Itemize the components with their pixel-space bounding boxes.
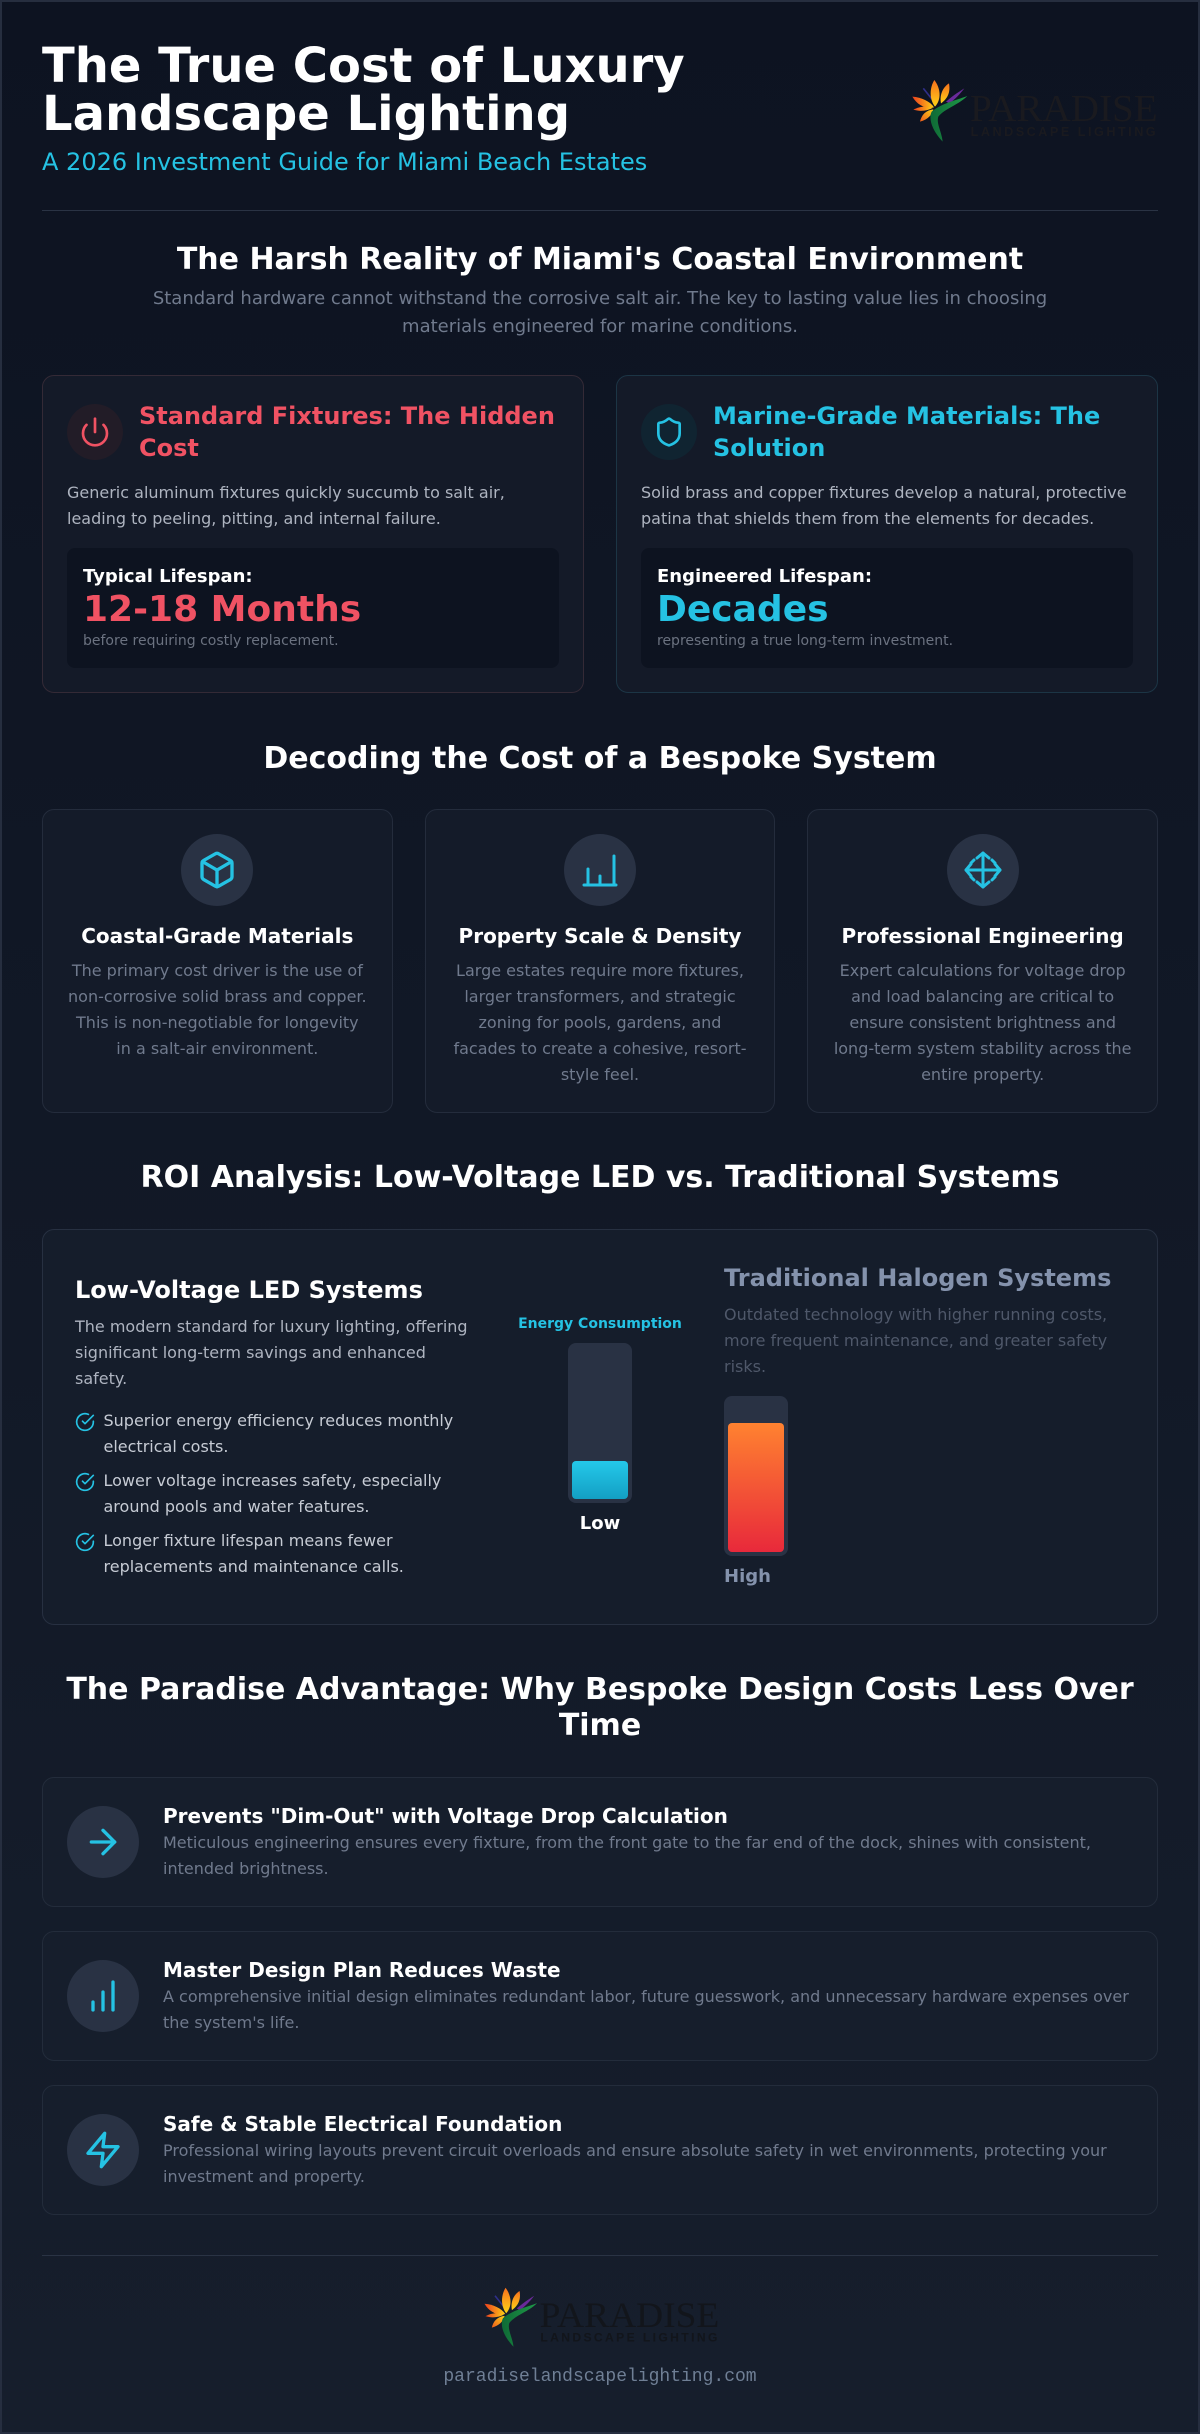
card text bbox=[834, 960, 1132, 1084]
benefit 3 bbox=[104, 1530, 404, 1576]
halogen description: risks. bbox=[724, 1356, 766, 1376]
benefit 2: around pools and water features. bbox=[104, 1496, 370, 1516]
panel: ROI comparison bbox=[42, 1229, 1158, 1625]
card text: leading to peeling, pitting, and internal failure. bbox=[67, 509, 441, 528]
note: representing a true long-term investment. bbox=[657, 633, 953, 649]
row text: intended brightness. bbox=[163, 1859, 329, 1878]
card text: style feel. bbox=[561, 1064, 639, 1084]
halogen column title: Traditional Halogen Systems bbox=[724, 1264, 1111, 1292]
panel: marine-grade materials bbox=[616, 375, 1158, 693]
card text: non-corrosive solid brass and copper. bbox=[68, 986, 367, 1006]
heading: decoding the cost: Decoding the Cost of a Bespoke System bbox=[263, 741, 937, 776]
card text: Generic aluminum fixtures quickly succumb to salt air, bbox=[67, 483, 505, 502]
card title: Property Scale & Density bbox=[459, 924, 741, 948]
card text: larger transformers, and strategic bbox=[464, 986, 736, 1006]
website URL: paradiselandscapelighting.com bbox=[443, 2367, 757, 2387]
title bbox=[42, 38, 685, 142]
icon: lightning bbox=[67, 2114, 139, 2186]
benefit 2 bbox=[104, 1470, 441, 1516]
heading: Paradise advantage: The Paradise Advantage: Why Bespoke Design Costs Less Over bbox=[66, 1672, 1134, 1707]
card title: Marine-Grade Materials: The bbox=[713, 402, 1100, 430]
icon: box bbox=[181, 834, 253, 906]
callout: engineered lifespan bbox=[641, 548, 1133, 668]
card text: The primary cost driver is the use of bbox=[72, 960, 363, 980]
panel: voltage drop bbox=[42, 1777, 1158, 1907]
row text bbox=[163, 1987, 1129, 2032]
logo: Paradise Landscape Lighting: LANDSCAPE LIGHTING bbox=[971, 125, 1156, 139]
card title bbox=[713, 402, 1100, 462]
logo: footer bbox=[484, 2288, 719, 2346]
card title: Professional Engineering bbox=[842, 924, 1124, 948]
heading: harsh reality: The Harsh Reality of Miami's Coastal Environment bbox=[177, 242, 1023, 277]
value: Decades bbox=[657, 589, 829, 630]
card text bbox=[641, 483, 1127, 528]
callout: typical lifespan bbox=[67, 548, 559, 668]
row text: Meticulous engineering ensures every fixture, from the front gate to the far end of the dock, shines with consistent, bbox=[163, 1833, 1091, 1852]
LED value label: Low bbox=[580, 1513, 620, 1534]
benefit 3: Longer fixture lifespan means fewer bbox=[104, 1530, 393, 1550]
icon: arrow bbox=[67, 1806, 139, 1878]
card text bbox=[68, 960, 367, 1058]
header bbox=[42, 38, 1158, 176]
intro paragraph bbox=[153, 288, 1047, 337]
row title: Prevents "Dim-Out" with Voltage Drop Calculation bbox=[163, 1804, 728, 1828]
value: 12-18 Months bbox=[83, 589, 361, 630]
card text: patina that shields them from the elements for decades. bbox=[641, 509, 1094, 528]
card text bbox=[67, 483, 505, 528]
row text: investment and property. bbox=[163, 2167, 365, 2186]
row text: Professional wiring layouts prevent circuit overloads and ensure absolute safety in wet environments, protecting your bbox=[163, 2141, 1107, 2160]
logo: footer: PARADISE bbox=[539, 2295, 719, 2335]
bar: halogen energy high bbox=[724, 1396, 788, 1556]
bar: LED energy low bbox=[568, 1343, 632, 1503]
panel: coastal-grade materials bbox=[42, 809, 393, 1113]
check icon 2 bbox=[76, 1472, 94, 1492]
halogen description bbox=[724, 1304, 1107, 1376]
icon: compass bbox=[947, 834, 1019, 906]
title: The True Cost of Luxury bbox=[42, 38, 685, 94]
row text: A comprehensive initial design eliminates redundant labor, future guesswork, and unnecessary hardware expenses over bbox=[163, 1987, 1129, 2006]
halogen description: Outdated technology with higher running costs, bbox=[724, 1304, 1107, 1324]
card text: facades to create a cohesive, resort- bbox=[453, 1038, 746, 1058]
logo: Paradise Landscape Lighting: PARADISE bbox=[970, 88, 1158, 130]
card text: zoning for pools, gardens, and bbox=[479, 1012, 721, 1032]
intro paragraph: materials engineered for marine conditions. bbox=[402, 316, 798, 337]
benefit 1: Superior energy efficiency reduces monthly bbox=[104, 1410, 453, 1430]
footer bbox=[443, 2288, 757, 2387]
panel: property scale bbox=[425, 809, 775, 1113]
heading: Paradise advantage: Time bbox=[559, 1708, 641, 1743]
intro paragraph: Standard hardware cannot withstand the corrosive salt air. The key to lasting value lies in choosing bbox=[153, 288, 1047, 309]
label: Engineered Lifespan: bbox=[657, 566, 872, 587]
card title: Solution bbox=[713, 434, 825, 462]
card text bbox=[453, 960, 746, 1084]
row title: Master Design Plan Reduces Waste bbox=[163, 1958, 561, 1982]
card text: This is non-negotiable for longevity bbox=[76, 1012, 359, 1032]
note: before requiring costly replacement. bbox=[83, 633, 339, 649]
panel: electrical foundation bbox=[42, 2085, 1158, 2215]
row text bbox=[163, 2141, 1107, 2186]
row text: the system's life. bbox=[163, 2013, 299, 2032]
check icon 3 bbox=[76, 1532, 94, 1552]
benefit 1: electrical costs. bbox=[104, 1436, 228, 1456]
LED description bbox=[74, 1316, 468, 1388]
heading: Paradise advantage bbox=[66, 1672, 1134, 1743]
card text: long-term system stability across the bbox=[834, 1038, 1132, 1058]
halogen description: more frequent maintenance, and greater safety bbox=[724, 1330, 1107, 1350]
benefit 1 bbox=[104, 1410, 453, 1456]
logo: footer: LANDSCAPE LIGHTING bbox=[540, 2330, 717, 2344]
halogen value label: High bbox=[724, 1566, 771, 1587]
card text: Expert calculations for voltage drop bbox=[840, 960, 1126, 980]
benefit 2: Lower voltage increases safety, especially bbox=[104, 1470, 441, 1490]
LED column title: Low-Voltage LED Systems bbox=[75, 1276, 423, 1304]
label: Typical Lifespan: bbox=[83, 566, 253, 587]
icon: power bbox=[67, 404, 123, 460]
card text: and load balancing are critical to bbox=[851, 986, 1114, 1006]
card text: ensure consistent brightness and bbox=[849, 1012, 1116, 1032]
panel: standard fixtures bbox=[42, 375, 584, 693]
card text: in a salt-air environment. bbox=[116, 1038, 318, 1058]
LED description: safety. bbox=[75, 1368, 127, 1388]
card text: Large estates require more fixtures, bbox=[456, 960, 744, 980]
row text bbox=[163, 1833, 1091, 1878]
check icon 1 bbox=[76, 1412, 94, 1432]
title: Landscape Lighting bbox=[42, 86, 570, 142]
heading: ROI analysis: ROI Analysis: Low-Voltage LED vs. Traditional Systems bbox=[141, 1160, 1059, 1195]
icon: signal bars bbox=[67, 1960, 139, 2032]
LED description: significant long-term savings and enhanced bbox=[75, 1342, 426, 1362]
card title: Cost bbox=[139, 434, 199, 462]
icon: bar chart bbox=[564, 834, 636, 906]
logo: Paradise Landscape Lighting bbox=[912, 80, 1158, 142]
card text: Solid brass and copper fixtures develop a natural, protective bbox=[641, 483, 1127, 502]
benefit 3: replacements and maintenance calls. bbox=[104, 1556, 404, 1576]
row title: Safe & Stable Electrical Foundation bbox=[163, 2112, 562, 2136]
LED description: The modern standard for luxury lighting, offering bbox=[75, 1316, 468, 1336]
panel: professional engineering bbox=[807, 809, 1158, 1113]
card title: Standard Fixtures: The Hidden bbox=[139, 402, 555, 430]
icon: shield bbox=[641, 404, 697, 460]
subtitle: A 2026 Investment Guide for Miami Beach Estates bbox=[42, 148, 647, 176]
card text: entire property. bbox=[921, 1064, 1044, 1084]
chart label: Energy Consumption bbox=[518, 1316, 682, 1332]
card title: Coastal-Grade Materials bbox=[81, 924, 353, 948]
panel: master design bbox=[42, 1931, 1158, 2061]
card title bbox=[139, 402, 555, 462]
